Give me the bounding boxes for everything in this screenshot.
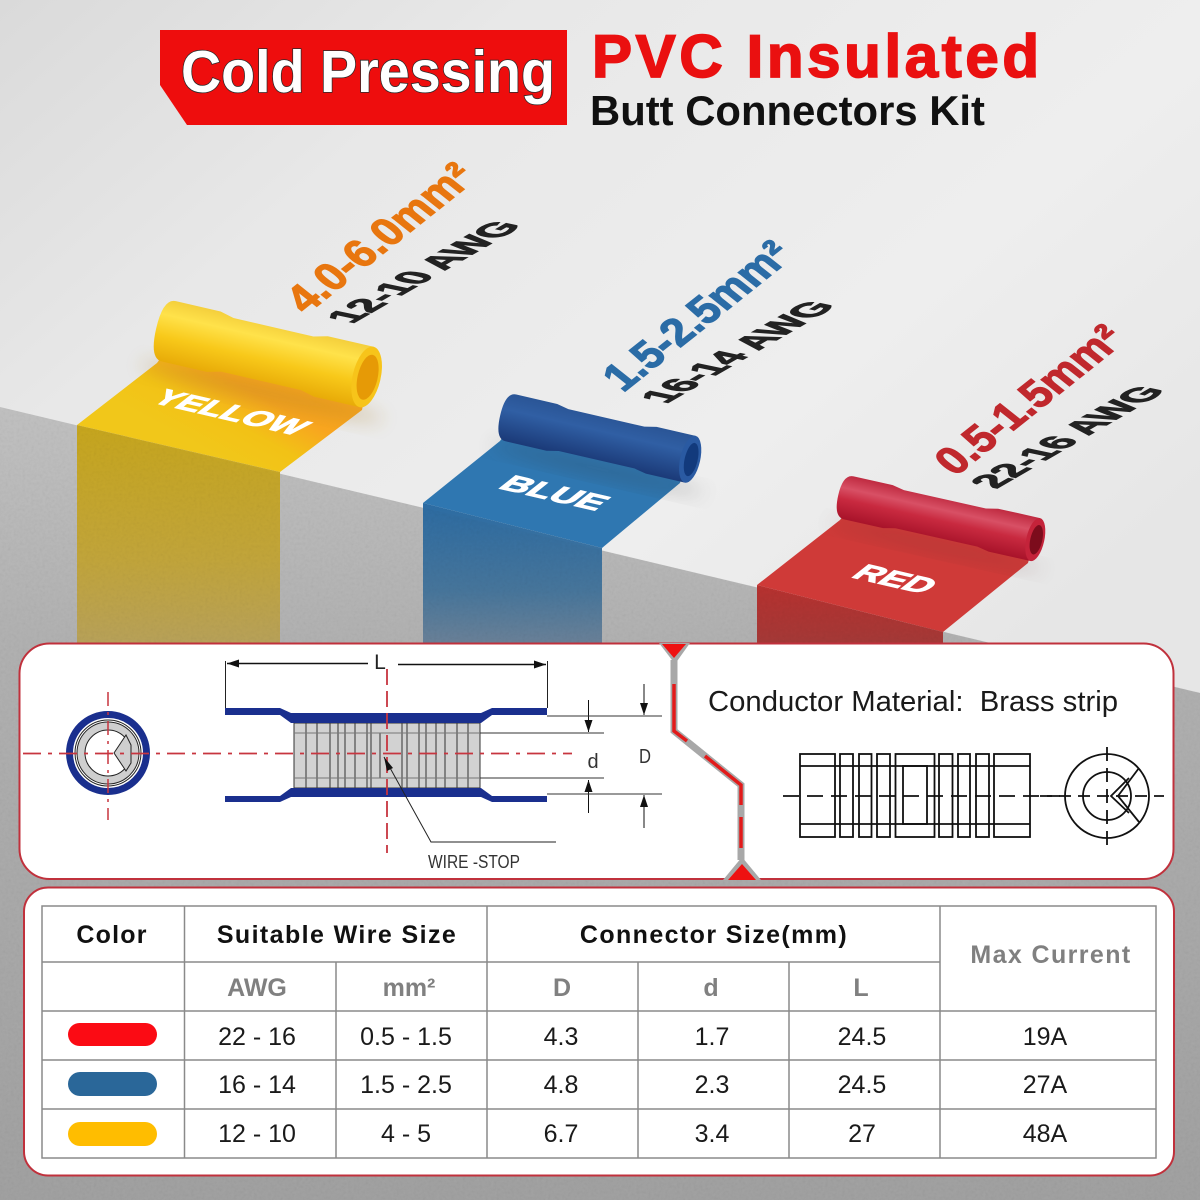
row: yellow <box>218 1120 1068 1148</box>
row: yellow: 12 - 10 <box>218 1120 296 1148</box>
panel: specification table <box>24 888 1174 1176</box>
band text: YELLOW: YELLOW <box>144 385 317 440</box>
row: blue: 24.5 <box>838 1071 886 1099</box>
table headers: Suitable Wire Size <box>217 921 457 949</box>
table headers: Color <box>76 921 148 949</box>
band: blue <box>423 420 685 650</box>
row: yellow: 4 - 5 <box>381 1120 431 1148</box>
background: top surface <box>0 0 1200 720</box>
panel background <box>20 644 1174 879</box>
connector: red <box>828 473 1055 576</box>
row: red: 22 - 16 <box>218 1023 296 1051</box>
table grid <box>42 906 1156 1158</box>
table headers: mm² <box>383 974 435 1002</box>
label: blue size mm: 1.5-2.5mm² <box>593 233 802 399</box>
label: yellow AWG: 12-10 AWG <box>316 218 532 326</box>
dimension L: L <box>374 651 386 674</box>
table headers: AWG <box>227 974 287 1002</box>
row: yellow: 27 <box>848 1120 876 1148</box>
title banner <box>160 30 567 125</box>
band text: BLUE: BLUE <box>491 471 617 515</box>
band: red <box>757 500 1032 650</box>
row: red <box>218 1023 1068 1051</box>
table headers: L <box>853 974 869 1002</box>
dimension D: D <box>639 746 651 768</box>
row: blue: 27A <box>1023 1071 1068 1099</box>
wire-stop callout: WIRE -STOP <box>428 852 520 872</box>
connector: yellow <box>138 296 399 429</box>
subtitle: Butt Connectors Kit: Butt Connectors Kit <box>590 87 985 134</box>
text: conductor material: Conductor Material: Brass strip <box>708 686 1118 718</box>
title: PVC Insulated: PVC Insulated <box>592 23 1039 90</box>
wire-stop callout <box>384 757 556 872</box>
connector side view <box>225 669 547 853</box>
connector: blue <box>489 391 717 500</box>
wall texture <box>6 420 1199 919</box>
band text: RED: RED <box>844 560 945 599</box>
row: blue: 16 - 14 <box>218 1071 296 1099</box>
row: blue: 4.8 <box>544 1071 578 1099</box>
centre line <box>23 752 572 754</box>
conductor line drawing <box>783 754 1060 837</box>
row: yellow: 6.7 <box>544 1120 578 1148</box>
row: yellow: 48A <box>1023 1120 1068 1148</box>
row: red: 19A <box>1023 1023 1068 1051</box>
label: red size mm: 0.5-1.5mm² <box>925 317 1134 483</box>
row: red: 24.5 <box>838 1023 886 1051</box>
row: blue <box>218 1071 1068 1099</box>
label: yellow size mm: 4.0-6.0mm² <box>276 155 485 321</box>
cross-section view <box>70 692 146 820</box>
conductor end view <box>1040 747 1164 848</box>
table headers: Connector Size(mm) <box>580 921 848 949</box>
table headers: Max Current <box>970 941 1132 969</box>
row: red: 0.5 - 1.5 <box>360 1023 452 1051</box>
row: blue: 2.3 <box>695 1071 729 1099</box>
separator: zigzag <box>659 643 761 880</box>
band: yellow <box>77 345 365 650</box>
colour swatches <box>68 1023 157 1146</box>
table headers <box>76 921 1132 1002</box>
table headers: D <box>553 974 571 1002</box>
panel: dimensions <box>20 643 1174 880</box>
label: blue AWG: 16-14 AWG <box>630 298 846 406</box>
background: grey wall <box>0 407 1200 1200</box>
dimension d: d <box>587 751 599 773</box>
title banner: Cold Pressing <box>181 39 555 105</box>
dimension d <box>480 700 604 813</box>
label: red AWG: 22-16 AWG <box>960 383 1176 491</box>
table headers: d <box>703 974 719 1002</box>
row: yellow: 3.4 <box>695 1120 729 1148</box>
row: blue: 1.5 - 2.5 <box>360 1071 452 1099</box>
row: red: 1.7 <box>695 1023 729 1051</box>
row: red: 4.3 <box>544 1023 578 1051</box>
